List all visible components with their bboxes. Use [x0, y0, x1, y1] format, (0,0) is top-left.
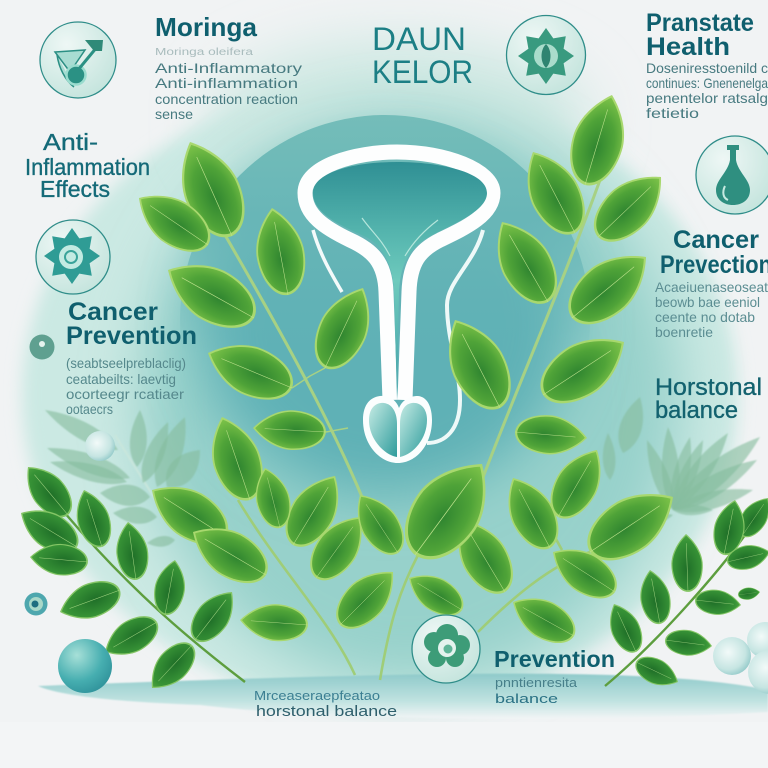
- text block: bottom caption: horstonal balance: [256, 703, 397, 720]
- heading: Anti-Inflammation Effects: Anti-: [43, 129, 98, 155]
- text block: Prevention bottom: Prevention: [494, 646, 615, 672]
- text block: Cancer Prevention left: ceatabeilts: laevtig: [66, 371, 176, 387]
- text block: Cancer Prevection right: ceente no dotab: [655, 309, 755, 325]
- text block: Cancer Prevention left: ootaecrs: [66, 401, 113, 417]
- right main branch: [431, 88, 677, 480]
- text block: Cancer Prevection right: beowb bae eeniol: [655, 294, 760, 310]
- text block: Cancer Prevention left: Cancer: [68, 298, 158, 326]
- small teal dot icon: [30, 334, 54, 360]
- heading: Horstonal balance: [655, 374, 762, 424]
- text block: Cancer Prevention left: ocorteegr rcatiaer: [66, 386, 184, 402]
- text block: Moringa: concentration reaction: [155, 91, 298, 107]
- text block: Cancer Prevention left: Prevention: [66, 322, 197, 350]
- title: [372, 21, 473, 90]
- spheres: right cluster: [713, 622, 768, 694]
- text block: Prostate Health: Pranstate: [646, 9, 754, 37]
- icon: star badge top: [506, 16, 586, 94]
- background fern: left: [41, 402, 209, 548]
- sphere: teal ball: [58, 639, 112, 693]
- title: DAUN: [372, 21, 466, 57]
- text block: Cancer Prevection right: [655, 226, 768, 340]
- prostate illustration: [305, 152, 493, 463]
- text block: Prostate Health: Health: [646, 33, 730, 61]
- text block: Cancer Prevection right: Cancer: [673, 226, 759, 254]
- text block: Cancer Prevection right: boenretie: [655, 324, 713, 340]
- text block: Moringa: Anti-Inflammatory: [155, 60, 302, 76]
- heading: Horstonal balance: Horstonal: [655, 374, 762, 401]
- text block: bottom caption: Mrceaseraepfeatao: [254, 688, 380, 703]
- text block: Prostate Health: fetietio: [646, 105, 699, 121]
- left main branch: [126, 131, 385, 497]
- sphere: white ball: [85, 431, 115, 461]
- title: KELOR: [372, 54, 473, 90]
- heading: Anti-Inflammation Effects: Effects: [40, 176, 110, 202]
- heading: Horstonal balance: balance: [655, 397, 738, 424]
- background fern: right: [602, 394, 768, 530]
- text block: Prevention bottom: balance: [495, 691, 558, 706]
- text block: Moringa: [155, 12, 302, 122]
- icon: moringa cone and arrow: [40, 22, 116, 98]
- text block: Cancer Prevention left: [66, 298, 197, 417]
- text block: bottom caption: [254, 688, 397, 720]
- text block: Cancer Prevention left: (seabtseelpreblaclig): [66, 355, 186, 371]
- small ring icon: [24, 592, 48, 616]
- text block: Prostate Health: [646, 9, 768, 121]
- text block: Moringa: Moringa: [155, 12, 258, 42]
- lower left sprig: [12, 456, 245, 699]
- text block: Moringa: sense: [155, 106, 193, 122]
- icon: flask: [696, 136, 768, 214]
- icon: flower badge bottom: [412, 615, 480, 683]
- text block: Moringa: Moringa oleifera: [155, 47, 254, 58]
- text block: Prevention bottom: [494, 646, 615, 706]
- heading: Anti-Inflammation Effects: Inflammation: [25, 154, 150, 180]
- text block: Prostate Health: Doseniresstoenild c: [646, 60, 768, 76]
- lower central branches: [139, 409, 688, 680]
- text block: Cancer Prevection right: Acaeiuenaseoseat: [655, 279, 768, 295]
- lower right sprig: [601, 491, 768, 693]
- bottom platform: [38, 674, 768, 719]
- heading: Anti-Inflammation Effects: [25, 129, 150, 202]
- teal dome behind the prostate: [180, 115, 590, 525]
- text block: Moringa: Anti-inflammation: [155, 75, 298, 91]
- text block: Prostate Health: penentelor ratsalg: [646, 90, 768, 106]
- icon: star badge left: [36, 220, 110, 294]
- text block: Prevention bottom: pnntienresita: [495, 675, 578, 690]
